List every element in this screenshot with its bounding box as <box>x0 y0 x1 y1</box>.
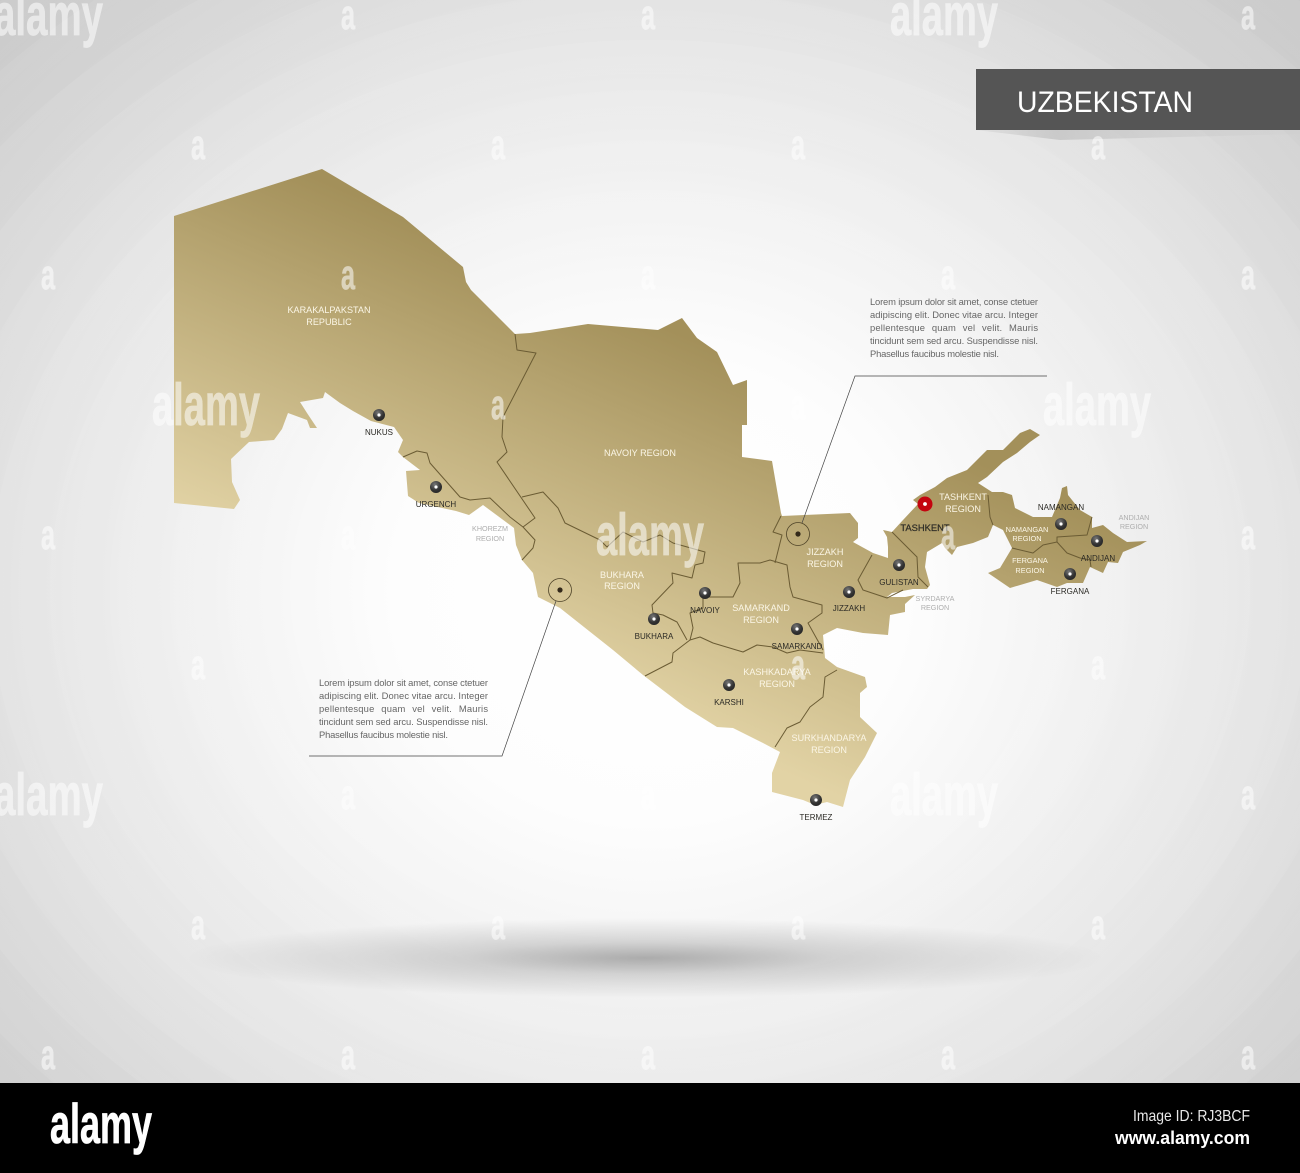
region labels <box>287 305 1149 755</box>
city pin: Navoiy: NAVOIY <box>690 606 720 615</box>
title banner: UZBEKISTAN <box>1017 86 1193 119</box>
region labels: KARAKALPAKSTAN <box>287 305 371 315</box>
region labels: FERGANA <box>1012 556 1048 565</box>
watermarks: alamy: alamy <box>1043 372 1151 438</box>
watermarks: small a grid: a <box>41 1031 55 1078</box>
city pin: Bukhara <box>635 613 674 641</box>
image id: Image ID: RJ3BCF <box>1133 1108 1250 1125</box>
watermarks: small a grid: a <box>941 1031 955 1078</box>
city pin: Samarkand: SAMARKAND <box>772 642 823 651</box>
callout: lower left text and leader line: tincidunt sem sed arcu. Suspendisse nisl. <box>319 716 488 727</box>
callout: upper right text and leader line: pellentesque quam vel velit. Mauris <box>870 322 1038 333</box>
watermarks: small a grid: a <box>491 121 505 168</box>
watermarks: small a grid: a <box>341 251 355 298</box>
watermarks: small a grid: a <box>941 511 955 558</box>
map of Uzbekistan <box>174 169 1147 807</box>
callout: upper right text and leader line: Lorem ipsum dolor sit amet, conse ctetuer <box>870 296 1038 307</box>
watermarks: small a grid: a <box>341 771 355 818</box>
city pin: Karshi <box>714 679 744 707</box>
watermarks: small a grid: a <box>791 381 805 428</box>
region labels: REGION <box>476 534 504 543</box>
watermarks: small a grid: a <box>791 901 805 948</box>
city pin: Nukus <box>365 409 393 437</box>
callout: upper right text and leader line <box>786 296 1047 546</box>
city pin: Namangan <box>1038 503 1084 530</box>
watermarks: small a grid: a <box>641 1031 655 1078</box>
city pin: Jizzakh: JIZZAKH <box>833 604 865 613</box>
watermarks: small a grid: a <box>491 381 505 428</box>
title banner <box>976 69 1300 140</box>
region labels: BUKHARA <box>600 570 645 580</box>
region labels: REGION <box>1015 566 1045 575</box>
region labels: REGION <box>811 745 847 755</box>
watermarks: alamy <box>0 0 1151 828</box>
region labels: REGION <box>604 581 640 591</box>
watermarks: small a grid: a <box>41 511 55 558</box>
region labels: REGION <box>743 615 779 625</box>
watermarks: small a grid: a <box>1091 121 1105 168</box>
callout: lower left text and leader line: Lorem ipsum dolor sit amet, conse ctetuer <box>319 677 488 688</box>
region labels: REGION <box>945 504 981 514</box>
city pin: Gulistan: GULISTAN <box>879 578 919 587</box>
watermarks: alamy: alamy <box>596 502 704 568</box>
watermarks: small a grid: a <box>341 511 355 558</box>
watermarks: small a grid: a <box>491 901 505 948</box>
city pin: Karshi: KARSHI <box>714 698 744 707</box>
watermarks: alamy: alamy <box>890 762 998 828</box>
region labels: KHOREZM <box>472 524 508 533</box>
watermarks: small a grid: a <box>41 251 55 298</box>
region labels: TASHKENT <box>939 492 987 502</box>
callout: lower left text and leader line: Phasellus faucibus molestie nisl. <box>319 729 448 740</box>
city pin: Fergana: FERGANA <box>1051 587 1090 596</box>
city pin: Bukhara: BUKHARA <box>635 632 674 641</box>
callout: lower left text and leader line <box>309 578 572 756</box>
region labels: REPUBLIC <box>306 317 352 327</box>
callout: lower left text and leader line: adipiscing elit. Donec vitae arcu. Integer <box>319 690 488 701</box>
region labels: SURKHANDARYA <box>792 733 867 743</box>
city pin: Andijan <box>1081 535 1115 563</box>
region labels: JIZZAKH <box>807 547 843 557</box>
watermarks: small a grid: a <box>791 641 805 688</box>
capital pin: Tashkent: TASHKENT <box>900 522 950 533</box>
watermarks: small a grid: a <box>1091 901 1105 948</box>
city pin: Nukus: NUKUS <box>365 428 393 437</box>
footer bar <box>0 1083 1300 1173</box>
callout: upper right text and leader line: tincidunt sem sed arcu. Suspendisse nisl. <box>870 335 1038 346</box>
city pin: Termez <box>800 794 833 822</box>
city pin: Urgench: URGENCH <box>416 500 456 509</box>
city pin: Fergana <box>1051 568 1090 596</box>
region labels: REGION <box>807 559 843 569</box>
watermarks: small a grid: a <box>641 771 655 818</box>
region labels: SYRDARYA <box>916 594 955 603</box>
city pin: Andijan: ANDIJAN <box>1081 554 1115 563</box>
watermarks: small a grid: a <box>791 121 805 168</box>
watermarks: small a grid: a <box>191 641 205 688</box>
regional borders <box>403 334 1092 747</box>
region labels: KASHKADARYA <box>743 667 812 677</box>
region labels: SAMARKAND <box>732 603 790 613</box>
watermarks: small a grid: a <box>341 1031 355 1078</box>
region labels: REGION <box>921 603 949 612</box>
watermarks: small a grid: a <box>1241 511 1255 558</box>
map outline <box>174 169 1147 807</box>
website: www.alamy.com <box>1114 1128 1250 1148</box>
watermarks: small a grid: a <box>191 121 205 168</box>
city pin: Navoiy <box>690 587 720 615</box>
city pin: Samarkand <box>772 623 823 651</box>
region labels: REGION <box>1012 534 1042 543</box>
watermarks: small a grid: a <box>491 641 505 688</box>
watermarks: small a grid: a <box>1241 1031 1255 1078</box>
city pin: Termez: TERMEZ <box>800 813 833 822</box>
watermarks: alamy: alamy <box>152 372 260 438</box>
capital pin: Tashkent <box>900 496 950 533</box>
watermarks: small a grid: a <box>1241 771 1255 818</box>
floating shadow under the map <box>185 918 1105 998</box>
city pin: Urgench <box>416 481 456 509</box>
callout: upper right text and leader line: Phasellus faucibus molestie nisl. <box>870 348 999 359</box>
region labels: REGION <box>759 679 795 689</box>
region labels: REGION <box>1120 522 1148 531</box>
city pin: Gulistan <box>879 559 919 587</box>
watermarks: small a grid: a <box>1091 641 1105 688</box>
city pin: Namangan: NAMANGAN <box>1038 503 1084 512</box>
region labels: ANDIJAN <box>1119 513 1149 522</box>
watermarks: small a grid: a <box>191 901 205 948</box>
city pin: Jizzakh <box>833 586 865 613</box>
watermarks: small a grid: a <box>941 251 955 298</box>
region labels: NAMANGAN <box>1006 525 1048 534</box>
region labels: NAVOIY REGION <box>604 448 676 458</box>
watermarks: small a grid: a <box>1241 251 1255 298</box>
watermarks: small a grid: a <box>641 251 655 298</box>
callout: lower left text and leader line: pellentesque quam vel velit. Mauris <box>319 703 488 714</box>
callout: upper right text and leader line: adipiscing elit. Donec vitae arcu. Integer <box>870 309 1038 320</box>
footer logo: alamy <box>50 1092 152 1155</box>
